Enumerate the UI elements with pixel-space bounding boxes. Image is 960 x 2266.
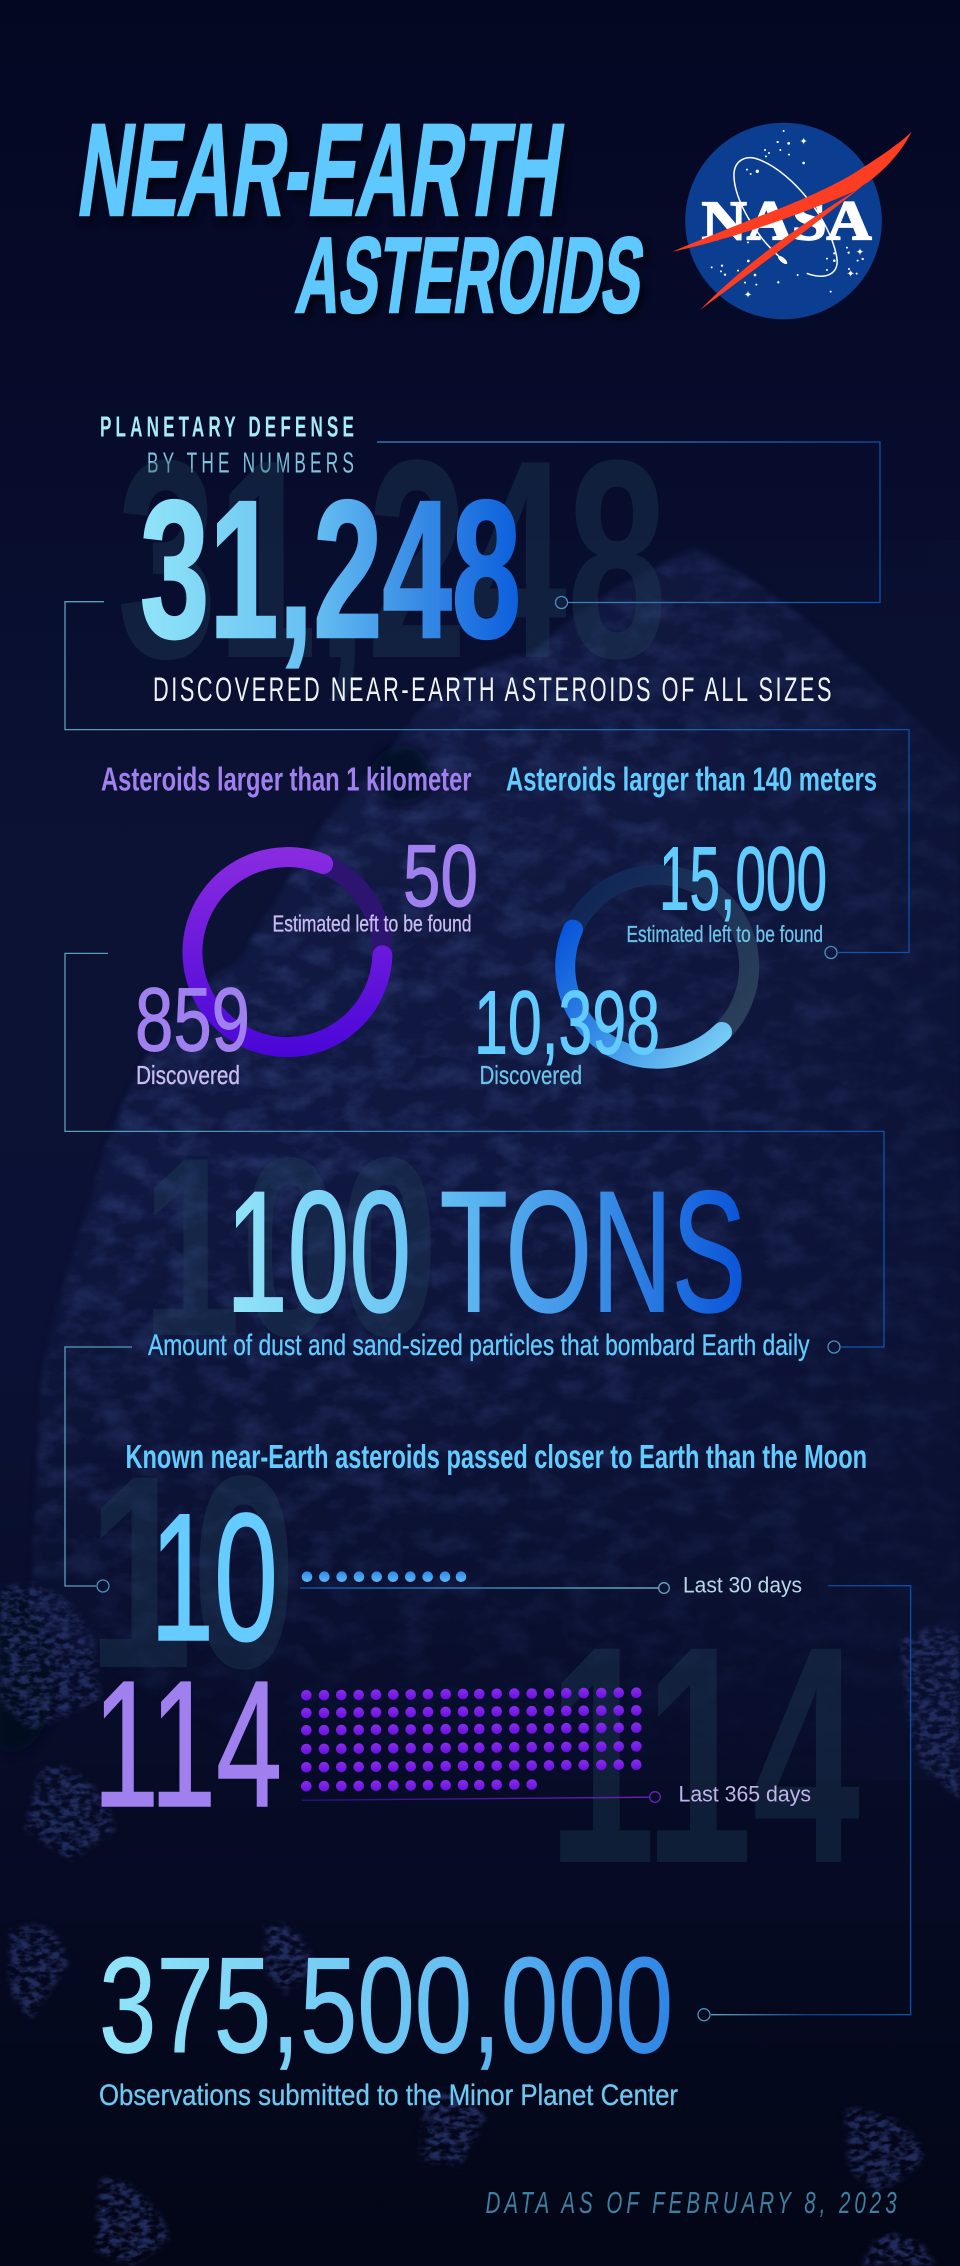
icon: NASA logo <box>672 123 912 319</box>
panel: asteroids larger than 1 kilometer: 50 <box>403 826 478 925</box>
dots: 10 asteroids <box>302 1571 466 1582</box>
stat: 100 tons <box>148 1156 810 1362</box>
stat: last 30 days: Last 30 days <box>683 1573 802 1598</box>
connector: frame one <box>65 442 909 958</box>
section heading: planetary defense: BY THE NUMBERS <box>147 448 358 480</box>
section heading: planetary defense <box>100 412 358 480</box>
panel: asteroids larger than 140 meters: 10,398 <box>474 974 660 1074</box>
section heading: planetary defense: PLANETARY DEFENSE <box>100 412 358 444</box>
panel: asteroids larger than 140 meters <box>474 760 877 1090</box>
donut chart: 140 m <box>565 875 749 1059</box>
panel: asteroids larger than 1 kilometer: Estimated left to be found <box>272 910 472 936</box>
stat: observations: Observations submitted to the Minor Planet Center <box>99 2079 678 2112</box>
ghost number 10: 10 <box>88 1419 296 1726</box>
stat: last 30 days <box>150 1475 802 1679</box>
ghost number 31,248: 31,248 <box>117 401 667 717</box>
stat: last 30 days: 10 <box>150 1475 278 1679</box>
title: ASTEROIDS <box>291 215 652 335</box>
donut chart: 1 km <box>192 857 382 1047</box>
stat: 31,248 discovered: 31,248 <box>140 460 521 679</box>
panel: asteroids larger than 140 meters: Estimated left to be found <box>626 921 823 947</box>
panel: asteroids larger than 1 kilometer: Asteroids larger than 1 kilometer <box>101 760 472 798</box>
stat: observations <box>99 1929 678 2112</box>
panel: asteroids larger than 1 kilometer <box>101 760 478 1090</box>
panel: asteroids larger than 140 meters: 15,000 <box>659 830 827 930</box>
panel: asteroids larger than 1 kilometer: Discovered <box>136 1060 240 1090</box>
stat: last 365 days: 114 <box>93 1644 282 1845</box>
stat: last 365 days <box>93 1644 811 1845</box>
panel: asteroids larger than 140 meters: Discovered <box>480 1060 582 1090</box>
stat: last 365 days: Last 365 days <box>678 1782 811 1807</box>
connector: frame two <box>65 953 884 1592</box>
connector: frame three <box>698 1586 911 2021</box>
dots: 114 asteroids <box>301 1687 642 1792</box>
title <box>71 97 652 335</box>
icon: NASA logo: NASA <box>702 190 872 252</box>
panel: asteroids larger than 1 kilometer: 859 <box>135 971 250 1071</box>
ghost number 100: 100 <box>142 1105 438 1390</box>
title: NEAR-EARTH <box>71 97 573 243</box>
stat: observations: 375,500,000 <box>99 1929 673 2081</box>
